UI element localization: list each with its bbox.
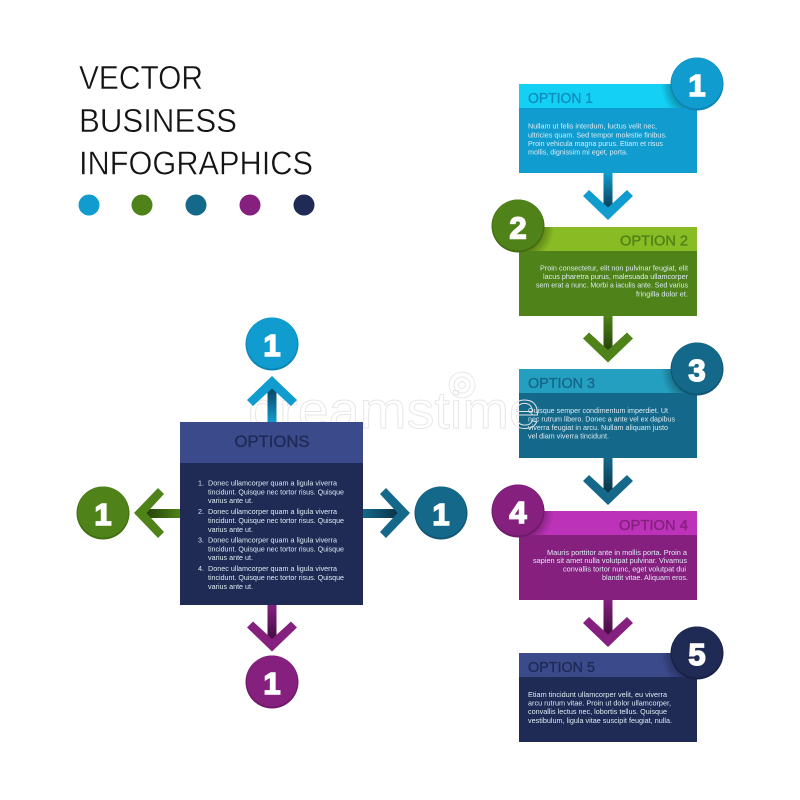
watermark: dreamstime: [248, 382, 540, 440]
badge: number 3: 3: [688, 353, 706, 388]
panel: central options box: tincidunt. Quisque nec tortor risus. Quisque: [208, 544, 344, 554]
panel: option 1: Nullam ut felis interdum, luctus velit nec,: [528, 122, 657, 130]
title: [79, 59, 313, 182]
panel: option 5: [519, 653, 697, 742]
title: VECTOR: [79, 59, 203, 96]
panel: option 4: OPTION 4: [619, 518, 688, 534]
badge: number 4: [492, 484, 544, 538]
panel: central options box: varius ante ut.: [208, 525, 253, 534]
panel: central options box: Donec ullamcorper quam a ligula viverra: [208, 564, 337, 573]
badge: left number 1: 1: [94, 497, 112, 532]
badge: bottom number 1: 1: [263, 666, 281, 701]
badge: number 5: [670, 626, 724, 680]
arrow: down: [247, 605, 297, 652]
badge: number 2: [492, 200, 544, 252]
badge: number 1: 1: [688, 68, 706, 103]
panel: option 1: mollis, dignissim mi eget, porta.: [528, 148, 628, 156]
panel: option 3: viverra feugiat in arcu. Nullam aliquam justo: [528, 423, 668, 432]
panel: central options box: 2.: [198, 507, 204, 516]
panel: central options box: [180, 422, 363, 605]
panel: option 5: OPTION 5: [528, 660, 595, 676]
panel: option 2: lacus pharetra purus, malesuada ullamcorper: [543, 272, 689, 281]
badge: number 2: 2: [509, 210, 527, 246]
panel: option 1: OPTION 1: [528, 91, 593, 107]
panel: central options box: Donec ullamcorper quam a ligula viverra: [208, 507, 337, 516]
badge: number 1: [670, 58, 724, 110]
badge: right number 1: [414, 486, 468, 540]
panel: option 1: [519, 84, 697, 173]
panel: central options box: tincidunt. Quisque nec tortor risus. Quisque: [208, 573, 344, 582]
badge: left number 1: [76, 486, 130, 540]
badge: right number 1: 1: [432, 497, 450, 532]
panel: option 2: fringilla dolor et.: [636, 290, 688, 298]
panel: option 2: sem erat a nunc. Morbi a iaculis ante. Sed varius: [536, 280, 688, 290]
panel: central options box: 4.: [198, 564, 204, 573]
panel: central options box: tincidunt. Quisque nec tortor risus. Quisque: [208, 488, 344, 496]
arrow: right: [363, 488, 410, 538]
panel: central options box: varius ante ut.: [208, 496, 253, 505]
panel: central options box: varius ante ut.: [208, 582, 253, 591]
panel: central options box: OPTIONS: [234, 432, 310, 451]
badge: top number 1: 1: [263, 328, 281, 363]
arrow: option 1 to 2: [583, 173, 633, 220]
panel: option 5: vestibulum, ligula vitae suscipit feugiat, nulla.: [528, 716, 672, 725]
panel: central options box: varius ante ut.: [208, 553, 253, 562]
badge: bottom number 1: [246, 656, 298, 708]
arrow: option 3 to 4: [583, 458, 633, 505]
badge: number 5: 5: [688, 637, 706, 672]
panel: option 4: [519, 511, 697, 600]
panel: option 4: sapien sit amet nulla volutpat pulvinar. Vivamus: [533, 556, 687, 565]
title: INFOGRAPHICS: [79, 144, 313, 182]
arrow: up: [247, 376, 297, 422]
colour dots: [78, 194, 314, 216]
arrow: option 4 to 5: [583, 600, 633, 647]
badge: number 3: [670, 342, 724, 396]
panel: option 2: [519, 227, 697, 316]
arrow: option 2 to 3: [583, 316, 633, 362]
title: BUSINESS: [79, 102, 237, 139]
panel: option 3: OPTION 3: [528, 376, 595, 392]
badge: top number 1: [246, 318, 298, 370]
panel: option 1: Proin vehicula magna purus. Etiam et risus: [528, 139, 663, 148]
badge: number 4: 4: [509, 495, 527, 530]
arrow: left: [134, 488, 180, 538]
panel: option 2: Proin consectetur, elit non pulvinar feugiat, elit: [540, 264, 688, 272]
panel: option 3: vel diam viverra tincidunt.: [528, 432, 609, 440]
panel: central options box: tincidunt. Quisque nec tortor risus. Quisque: [208, 516, 344, 525]
infographic canvas: [76, 58, 724, 742]
panel: option 5: Etiam tincidunt ullamcorper velit, eu viverra: [528, 690, 667, 699]
panel: option 4: Mauris porttitor ante in mollis porta. Proin a: [547, 548, 687, 557]
panel: central options box: Donec ullamcorper quam a ligula viverra: [208, 536, 337, 544]
panel: option 5: arcu rutrum vitae. Proin ut dolor ullamcorper,: [528, 698, 671, 708]
panel: option 4: convallis tortor nunc, eget volutpat dui: [563, 564, 686, 574]
panel: option 4: blandit vitae. Aliquam eros.: [602, 573, 688, 582]
panel: central options box: Donec ullamcorper quam a ligula viverra: [208, 478, 337, 488]
panel: central options box: 3.: [198, 536, 204, 544]
panel: option 3: [519, 369, 697, 458]
panel: option 3: Quisque semper condimentum imperdiet. Ut: [528, 406, 668, 415]
panel: option 1: ultricies quam. Sed tempor molestie finibus.: [528, 130, 667, 140]
panel: option 2: OPTION 2: [620, 234, 688, 250]
panel: option 3: nec rutrum libero. Donec a ante vel ex dapibus: [528, 414, 675, 424]
panel: central options box: 1.: [198, 478, 204, 488]
panel: option 5: convallis lectus nec, lobortis tellus. Quisque: [528, 707, 667, 716]
